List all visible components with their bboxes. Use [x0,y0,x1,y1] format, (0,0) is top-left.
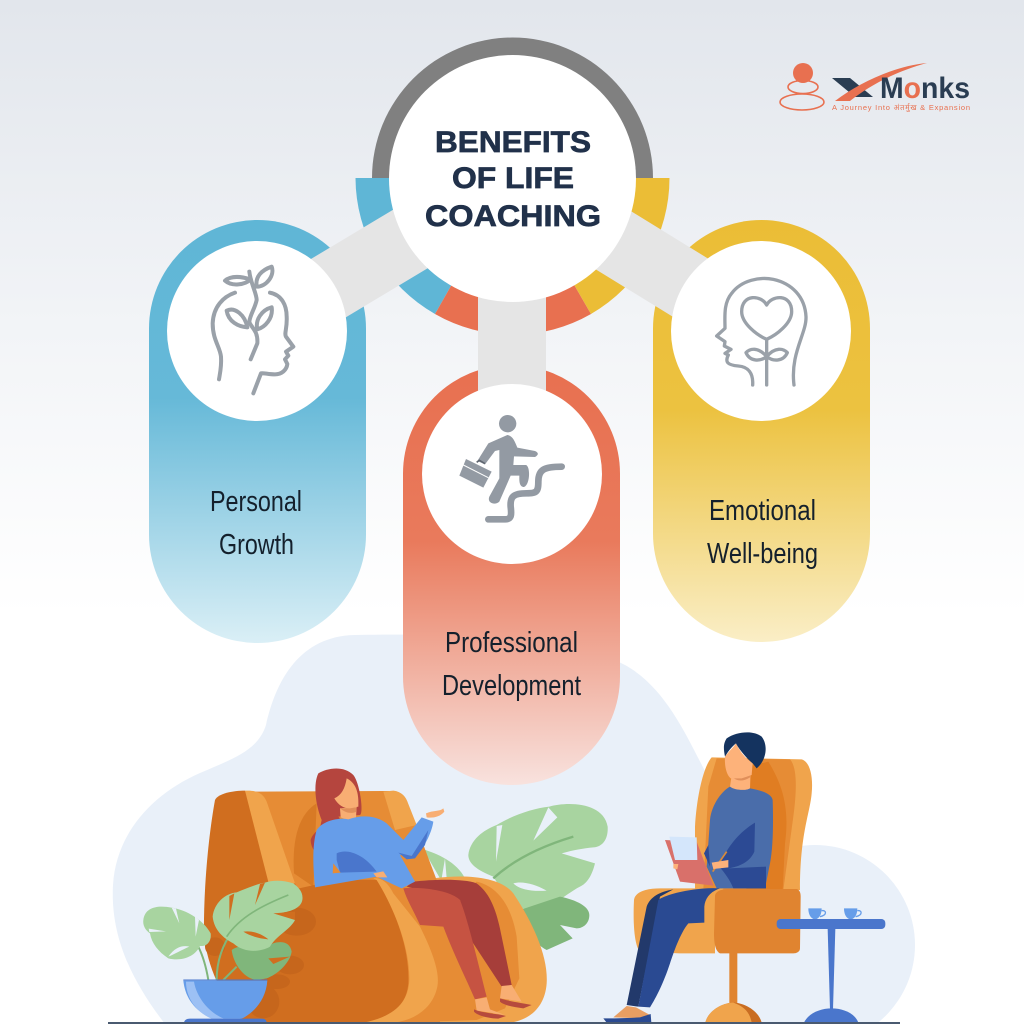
panel: personal growth pill [149,220,366,643]
chair back [695,757,812,890]
logo X mark [832,63,927,101]
connectors [257,178,761,474]
label: personal growth [210,486,302,561]
icon: head with heart flower [717,278,806,385]
side table with cups [777,908,885,1023]
panel: emotional well-being pill [653,220,870,642]
centre ring [356,37,670,335]
icon circles [167,241,851,564]
leaf shadows on armchair [205,908,316,1018]
chair seat arm back [634,888,723,953]
illustration: coach in chair with table [603,732,885,1023]
panel: professional development pill [403,365,620,785]
large monstera leaves behind chair [423,804,608,950]
label: professional development: Development [442,670,581,702]
label: emotional well-being: Well-being [707,538,818,570]
logo stones icon [780,63,824,110]
title: COACHING [425,200,601,233]
illustration: client in armchair with plants [143,769,608,1023]
label: emotional well-being: Emotional [709,495,816,527]
ring: orange segment [435,178,591,335]
title [425,126,601,233]
armchair [204,791,547,1023]
label: personal growth: Growth [219,529,294,561]
title: OF LIFE [452,162,574,195]
label: professional development: Professional [445,627,578,659]
ring: grey arc [372,37,653,178]
icon: businessman climbing stairs [459,415,562,519]
logo wordmark: Monks [880,72,970,105]
background blobs [113,635,915,1024]
ring: gold segment [512,178,670,314]
ground line [108,1022,900,1024]
chair post and base [705,952,762,1023]
coach figure [603,732,773,1023]
title: BENEFITS [435,126,591,159]
potted plant [143,881,303,1023]
title circle [389,55,636,302]
label: emotional well-being [707,495,818,570]
label: professional development [442,627,581,702]
woman [311,769,532,1019]
icon: head with sprouting plant [213,267,293,393]
logo tagline: A Journey Into अंतर्मुख & Expansion [832,103,970,113]
ring: blue segment [356,178,512,314]
label: personal growth: Personal [210,486,302,518]
chair front arm [714,889,801,953]
logo [780,63,970,113]
